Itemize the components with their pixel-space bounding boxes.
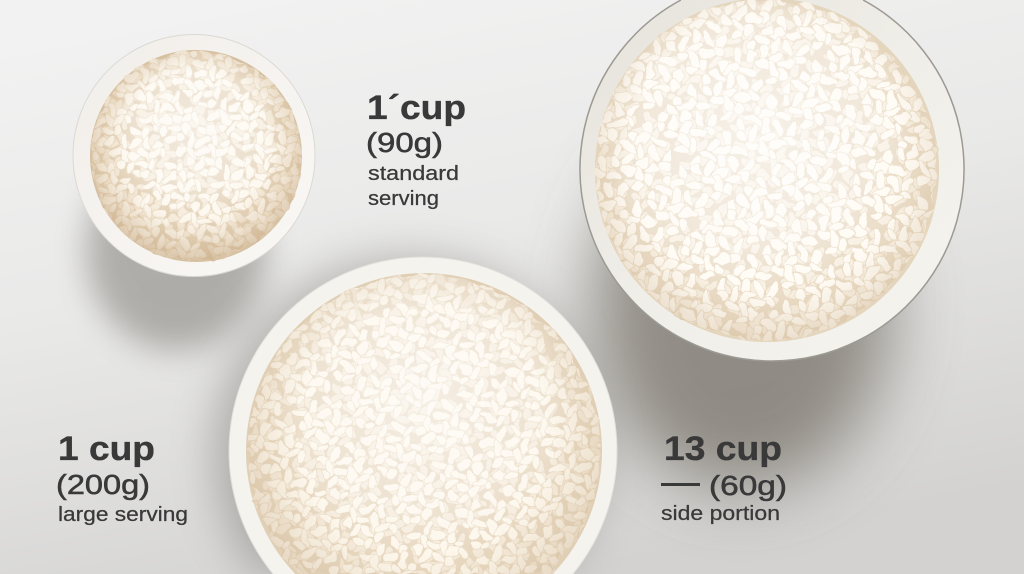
label: standard serving: standard [368,163,459,185]
label: large serving [56,430,188,526]
label: standard serving [366,89,466,210]
bowl: bottom centre [229,257,617,574]
label: standard serving: (90g) [366,127,443,158]
label: side portion: 13 cup [664,430,782,468]
label: large serving: large serving [58,504,188,526]
bowl: small top-left [73,34,315,276]
rice: small bowl [85,45,307,267]
label: standard serving: 1´cup [367,89,466,127]
label: side portion: (60g) [709,470,787,501]
bowl: large top-right [580,0,964,361]
label: large serving: 1 cup [58,430,155,468]
rice: large top-right bowl [590,0,942,346]
label: side portion [661,430,787,525]
label: large serving: (200g) [56,469,150,500]
label: standard serving: serving [368,188,439,210]
label: side portion: side portion [661,503,780,525]
rice: bottom bowl [243,270,605,574]
shadows cast by the bowls [86,120,892,574]
